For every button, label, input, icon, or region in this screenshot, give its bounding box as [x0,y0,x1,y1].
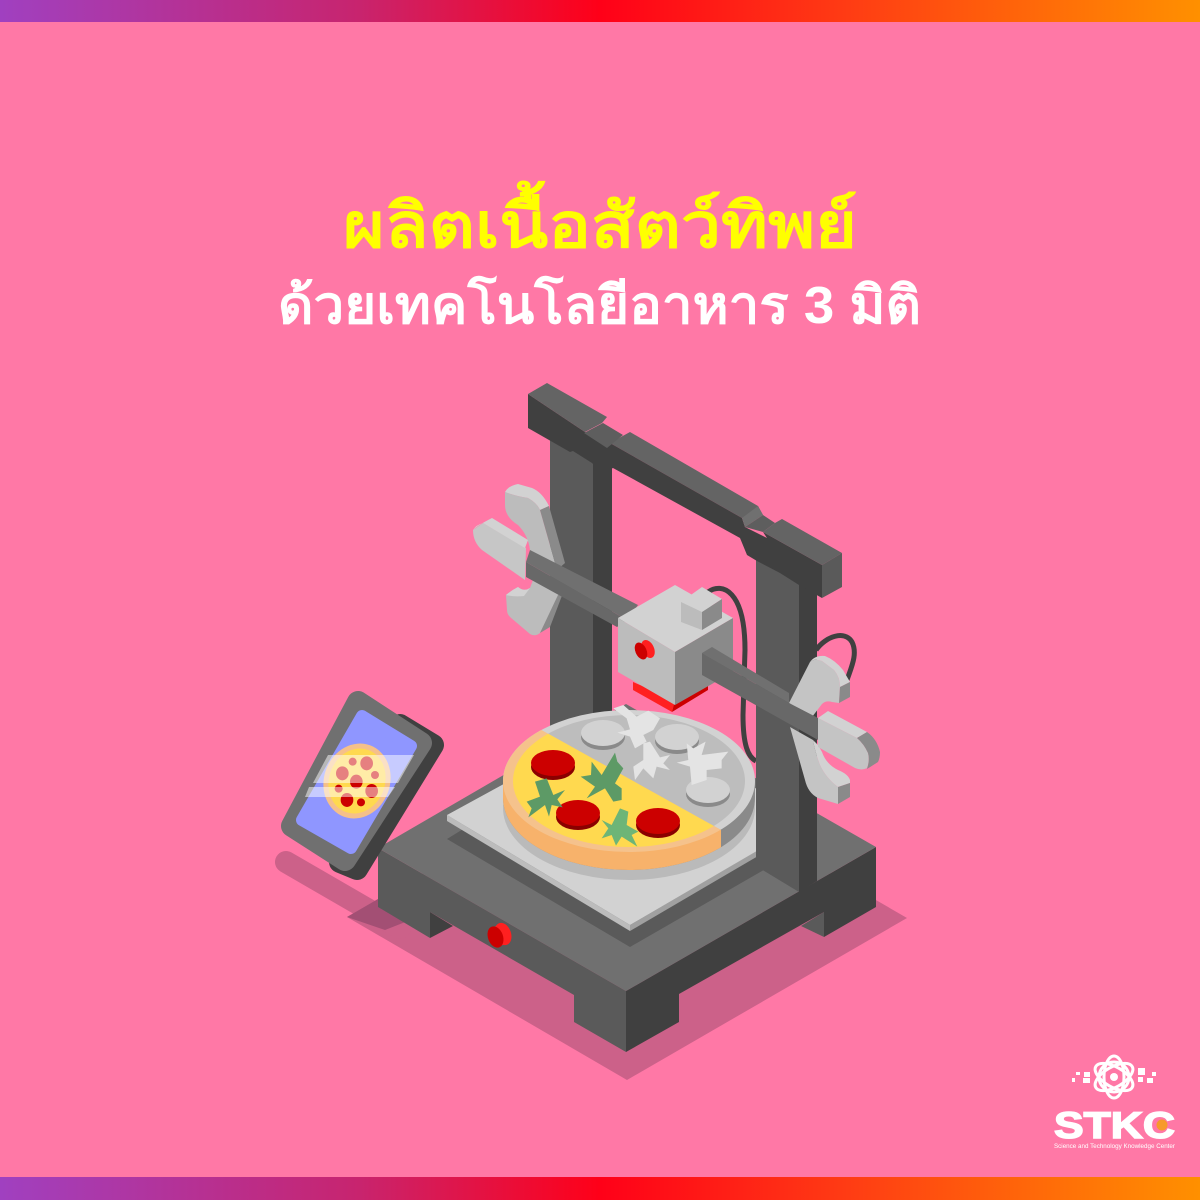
screen scan bands [305,755,414,797]
base left face [378,848,626,1052]
base rear right foot [801,912,824,937]
top gradient bar [0,0,1200,22]
red base button [485,920,514,950]
pepperoni [531,750,680,838]
base right face [626,847,876,1052]
beam top face [610,432,763,518]
grey tray [513,715,745,847]
beam side [528,394,822,598]
raw topping discs [581,720,730,807]
pixel squares [1072,1068,1156,1083]
tablet [292,702,433,869]
cable from print head [708,588,756,761]
head red button [632,638,657,661]
right rod [702,647,818,740]
title [278,180,921,335]
title line 2: ด้วยเทคโนโลยีอาหาร 3 มิติ [278,274,921,335]
top beam [528,383,842,598]
right end face [822,553,842,598]
atom emblem [1091,1056,1137,1098]
white unprinted leaves [613,705,728,785]
right joint top [742,506,763,527]
floor shadows [286,756,907,1080]
left joint top [584,423,623,448]
grey rim [503,710,755,852]
base left feet notch [430,912,453,938]
pizza on screen [313,734,401,828]
orange dot [1156,1120,1168,1130]
cable to right nut [816,636,854,680]
left end block top [528,383,607,432]
overlap shadow [347,899,418,930]
base top [378,704,876,991]
grey side [503,726,755,870]
right wing nut back [789,656,850,804]
right column [756,556,817,892]
STKC wordmark: STKC [1054,1105,1175,1146]
printed pizza half [503,730,721,870]
disk shadow [503,736,755,880]
right end block top [763,519,842,565]
turntable disk and pizza [503,705,755,880]
left wing nut [473,484,565,635]
title line 1: ผลิตเนื้อสัตว์ทิพย์ [343,180,857,261]
main canvas [275,180,1175,1150]
tablet back [340,725,433,869]
left column [550,430,612,780]
tablet screen [302,716,411,848]
3D printer [378,383,880,1052]
logo subtitle: Science and Technology Knowledge Center [1054,1143,1176,1150]
tablet shadow [286,862,400,928]
green leaves [527,753,638,847]
plate shadow [447,750,800,947]
left rod [526,550,638,627]
red nozzle [633,680,708,712]
tablet front [292,702,421,860]
print head [618,585,733,705]
build plate [447,715,810,931]
right wing nut arm [818,711,880,770]
STKC logo [1054,1056,1176,1150]
base [378,704,876,1052]
head top block [681,587,722,630]
printer shadow [347,756,907,1080]
bottom gradient bar [0,1177,1200,1200]
